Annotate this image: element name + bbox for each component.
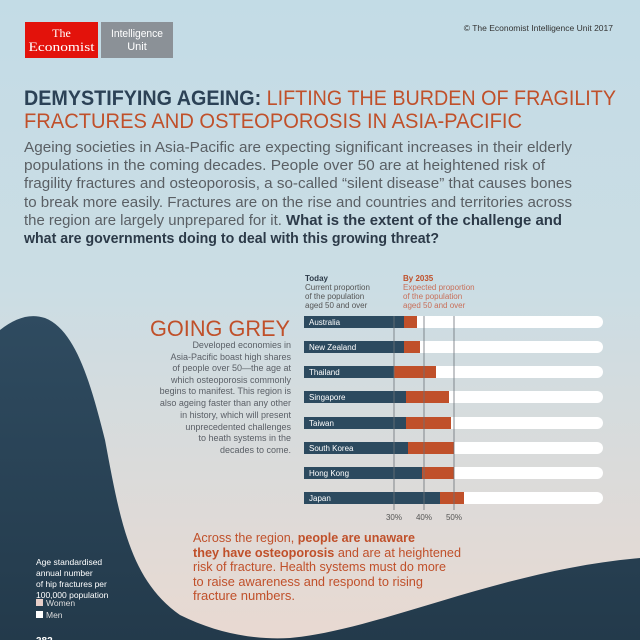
legend: hip fractures: Men [46, 610, 63, 620]
chart legend: of the population [305, 292, 364, 301]
chart legend: By 2035 [403, 274, 434, 283]
chart legend: Expected proportion [403, 283, 475, 292]
legend: hip fractures: of hip fractures per [36, 579, 107, 589]
callout: awareness: risk of fracture. Health systems must do more [193, 559, 446, 574]
intro text [23, 140, 573, 247]
legend: hip fractures: Women [46, 598, 75, 608]
callout: awareness: fracture numbers. [193, 588, 295, 603]
bar chart: Japan [309, 494, 331, 503]
bar chart: 50% [446, 513, 462, 522]
going grey paragraph: which osteoporosis commonly [170, 375, 291, 385]
title: DEMYSTIFYING AGEING: LIFTING THE BURDEN OF FRAGILITY [24, 87, 616, 110]
going grey paragraph: begins to manifest. This region is [160, 386, 291, 396]
going grey paragraph: in history, which will present [180, 410, 291, 420]
bar chart: Australia [309, 318, 341, 327]
bar chart: 30% [386, 513, 402, 522]
intro text: what are governments doing to deal with this growing threat? [23, 231, 439, 247]
intro text: fragility fractures and osteoporosis, a so-called “silent disease” that causes bones [24, 176, 572, 192]
title [24, 87, 616, 133]
dark wave shape [0, 316, 640, 640]
callout: awareness: they have osteoporosis and are at heightened [193, 545, 461, 560]
bar chart: Taiwan [309, 419, 334, 428]
bar chart: New Zealand [309, 343, 356, 352]
legend: hip fractures: annual number [36, 568, 93, 578]
bar chart: Singapore [309, 393, 346, 402]
chart legend [305, 274, 475, 310]
chart legend: of the population [403, 292, 462, 301]
chart legend: aged 50 and over [403, 301, 466, 310]
going grey paragraph: also ageing faster than any other [160, 398, 291, 408]
going grey paragraph [160, 340, 291, 455]
legend: hip fractures: 100,000 population [36, 590, 109, 600]
title: FRACTURES AND OSTEOPOROSIS IN ASIA-PACIFIC [24, 110, 522, 133]
bar chart: South Korea [309, 444, 354, 453]
logo [25, 22, 173, 58]
going grey paragraph: decades to come. [220, 445, 291, 455]
going grey paragraph: of people over 50—the age at [172, 363, 291, 373]
bar chart: Thailand [309, 368, 340, 377]
logo: Economist [28, 39, 95, 54]
copyright: © The Economist Intelligence Unit 2017 [464, 23, 613, 33]
going grey heading: GOING GREY [150, 316, 290, 341]
going grey paragraph: to heath systems in the [198, 433, 291, 443]
intro text: the region are largely unprepared for it. What is the extent of the challenge and [24, 213, 562, 229]
logo: Unit [127, 41, 147, 53]
chart legend: aged 50 and over [305, 301, 368, 310]
callout: awareness: Across the region, people are unaware [193, 530, 415, 545]
callout: awareness [193, 530, 461, 603]
intro text: populations in the coming decades. People over 50 are at heightened risk of [24, 158, 546, 174]
bar chart [304, 316, 603, 522]
bar chart: 40% [416, 513, 432, 522]
legend: hip fractures: Age standardised [36, 557, 102, 567]
intro text: Ageing societies in Asia-Pacific are expecting significant increases in their elderly [24, 140, 573, 156]
legend: hip fractures [36, 557, 109, 640]
callout: awareness: to raise awareness and respond to rising [193, 574, 423, 589]
chart legend: Current proportion [305, 283, 370, 292]
intro text: to break more easily. Fractures are on the rise and countries and territories across [24, 195, 572, 211]
logo: The [52, 26, 71, 40]
bar chart: Hong Kong [309, 469, 349, 478]
going grey paragraph: Developed economies in [192, 340, 291, 350]
going grey paragraph: unprecedented challenges [185, 422, 291, 432]
chart legend: Today [305, 274, 329, 283]
logo: Intelligence [111, 28, 163, 40]
going grey paragraph: Asia-Pacific boast high shares [170, 352, 291, 362]
